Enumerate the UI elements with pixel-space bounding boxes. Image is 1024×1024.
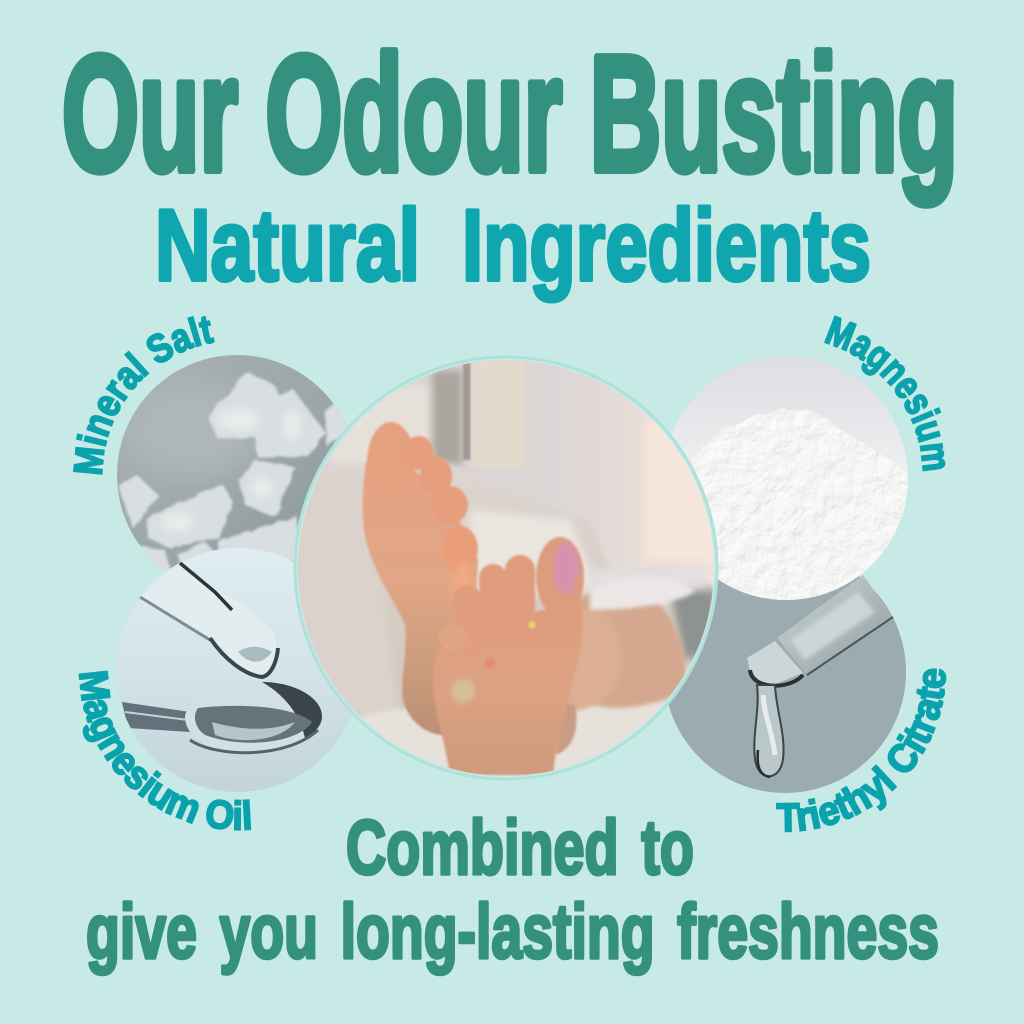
photo: magnesium powder (672, 356, 908, 600)
label: Mineral Salt: Mineral Salt (73, 316, 215, 475)
label: Magnesium Oil: Magnesium Oil (78, 670, 252, 831)
subtitle (155, 190, 871, 302)
photo: dropper bottle (747, 575, 893, 777)
subtitle: Ingredients (462, 190, 871, 302)
back foot (363, 422, 478, 735)
subtitle: Natural (155, 190, 420, 302)
label: Magnesium: Magnesium (824, 315, 946, 472)
label: Triethyl Citrate: Triethyl Citrate (776, 668, 946, 832)
photo: feet on sofa (290, 355, 730, 790)
front foot (433, 537, 584, 775)
photo: mineral salt (117, 355, 347, 572)
closing line 1: Combined to (346, 805, 694, 891)
photo: magnesium oil (116, 548, 352, 792)
photo: triethyl citrate background (668, 576, 906, 793)
legs (577, 591, 686, 708)
